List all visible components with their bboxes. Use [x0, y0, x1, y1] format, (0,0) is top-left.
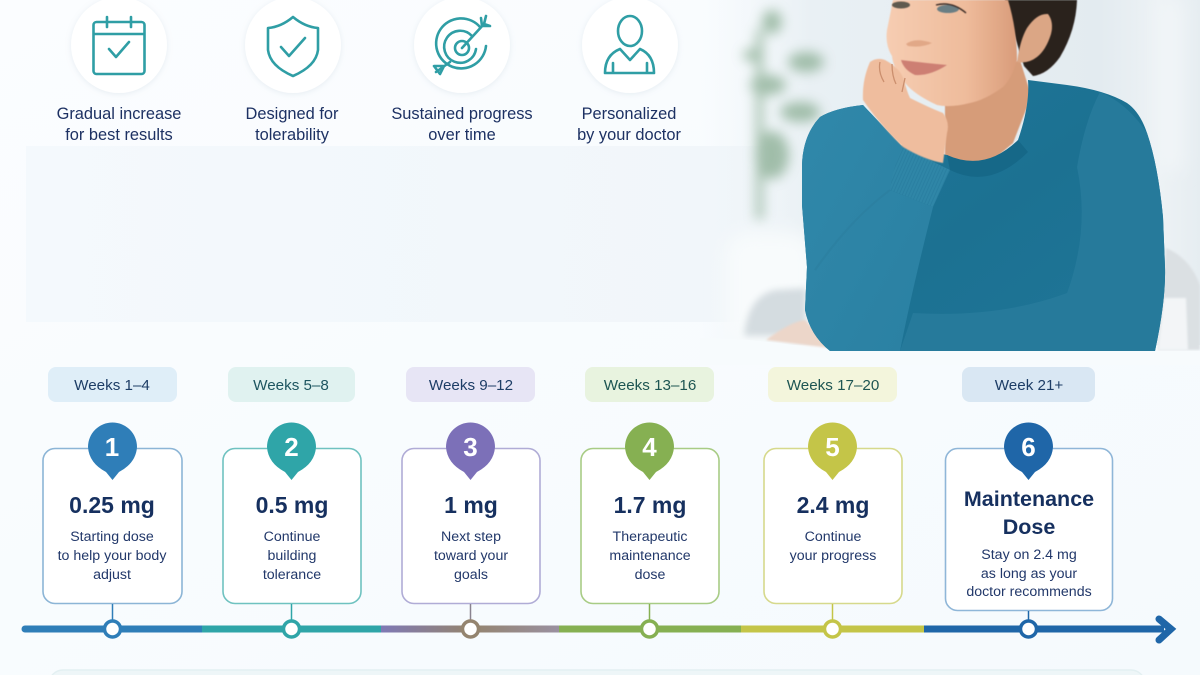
card: 1 mg: 1 mg	[444, 492, 498, 518]
card: 2.4 mg: 2.4 mg	[797, 492, 869, 518]
card: 2.4 mg: your progress	[790, 548, 876, 564]
card: 0.5 mg: building	[268, 548, 316, 564]
collar	[947, 140, 1028, 177]
card: 2.4 mg	[764, 448, 902, 604]
pill: week 21+	[962, 367, 1095, 402]
benefit: sustained progress	[391, 0, 533, 144]
marker 5: 5	[825, 432, 840, 462]
step 6	[946, 367, 1112, 637]
card: 0.25 mg: adjust	[93, 567, 131, 583]
hair	[1005, 0, 1077, 76]
benefit: personalized	[577, 0, 681, 144]
benefit: sustained progress: over time	[428, 126, 496, 144]
card: maintenance dose: as long as your	[981, 566, 1077, 582]
card: 1.7 mg: maintenance	[609, 548, 691, 564]
card: 1 mg: Next step	[441, 529, 501, 545]
step 1	[43, 367, 182, 637]
card: 0.5 mg: 0.5 mg	[256, 492, 328, 518]
timeline node 5	[824, 604, 840, 637]
marker 4	[625, 422, 674, 480]
pill: weeks 9-12	[406, 367, 535, 402]
card: maintenance dose: Stay on 2.4 mg	[981, 547, 1077, 563]
benefit: personalized: by your doctor	[577, 126, 681, 144]
benefit: gradual increase: Gradual increase	[57, 105, 181, 123]
timeline node 1	[104, 604, 120, 637]
timeline node 3	[462, 604, 478, 637]
marker 6: 6	[1021, 432, 1036, 462]
benefit: personalized: Personalized	[582, 105, 676, 123]
photo: woman resting chin on hand	[700, 0, 1200, 365]
face	[887, 0, 1017, 106]
card: 0.25 mg: Starting dose	[70, 529, 154, 545]
table edge	[700, 338, 1200, 365]
card: 1 mg: goals	[454, 567, 488, 583]
step 3	[402, 367, 540, 637]
marker 4: 4	[642, 432, 657, 462]
eyes, nose and mouth	[892, 2, 966, 75]
marker 2: 2	[284, 432, 299, 462]
card: maintenance dose: doctor recommends	[966, 584, 1092, 600]
card: 0.5 mg	[223, 448, 361, 604]
benefit: tolerability	[245, 0, 341, 144]
right arm	[900, 92, 1165, 351]
card: 1 mg: toward your	[434, 548, 508, 564]
marker 5	[808, 422, 857, 480]
hand	[863, 59, 948, 163]
card: maintenance dose: Maintenance	[964, 487, 1094, 511]
card: 0.5 mg: tolerance	[263, 567, 321, 583]
timeline node 2	[284, 604, 300, 637]
card: 1.7 mg	[581, 448, 719, 604]
icon: shield with check	[245, 0, 341, 93]
pill: weeks 5-8: Weeks 5–8	[253, 377, 329, 394]
ear	[1017, 14, 1052, 62]
marker 1	[88, 422, 137, 480]
benefit: tolerability: Designed for	[246, 105, 339, 123]
benefit: tolerability: tolerability	[255, 126, 330, 144]
card: 1 mg	[402, 448, 540, 604]
sweater body	[802, 80, 1165, 351]
marker 2	[267, 422, 316, 480]
pill: weeks 17-20: Weeks 17–20	[787, 377, 879, 394]
card: 1.7 mg: Therapeutic	[613, 529, 687, 545]
card: 0.25 mg	[43, 448, 182, 604]
card: 0.5 mg: Continue	[264, 529, 321, 545]
marker 3	[446, 422, 495, 480]
icon: target with arrow	[414, 0, 510, 93]
step 5	[764, 367, 902, 637]
faded blank panel	[26, 146, 816, 322]
pill: weeks 13-16: Weeks 13–16	[604, 377, 696, 394]
marker 1: 1	[105, 432, 119, 462]
timeline bar with arrow	[25, 619, 1171, 640]
marker 6	[1004, 422, 1053, 480]
timeline node 6	[1020, 611, 1036, 637]
card: maintenance dose: Dose	[1003, 515, 1055, 539]
left sleeve	[802, 105, 933, 351]
pill: weeks 5-8	[228, 367, 355, 402]
pill: weeks 1-4: Weeks 1–4	[74, 377, 150, 394]
pill: week 21+: Week 21+	[995, 377, 1063, 394]
card: maintenance dose	[946, 448, 1112, 610]
timeline node 4	[642, 604, 658, 637]
benefit: gradual increase: for best results	[65, 126, 173, 144]
pill: weeks 13-16	[585, 367, 714, 402]
bottom note panel (cropped)	[49, 670, 1145, 675]
card: 0.25 mg: 0.25 mg	[69, 492, 155, 518]
card: 0.25 mg: to help your body	[58, 548, 167, 564]
pill: weeks 1-4	[48, 367, 177, 402]
pill: weeks 17-20	[768, 367, 897, 402]
card: 1.7 mg: 1.7 mg	[614, 492, 686, 518]
card: 1.7 mg: dose	[635, 567, 665, 583]
benefit: gradual increase	[57, 0, 181, 144]
icon: calendar with check	[71, 0, 167, 93]
card: 2.4 mg: Continue	[805, 529, 862, 545]
pill: weeks 9-12: Weeks 9–12	[429, 377, 513, 394]
benefits row	[57, 0, 681, 144]
benefit: sustained progress: Sustained progress	[391, 105, 533, 123]
sweater cuff	[890, 147, 950, 207]
step 4	[581, 367, 719, 637]
marker 3: 3	[463, 432, 478, 462]
step 2	[223, 367, 361, 637]
icon: person	[582, 0, 678, 93]
neck	[945, 60, 1030, 165]
